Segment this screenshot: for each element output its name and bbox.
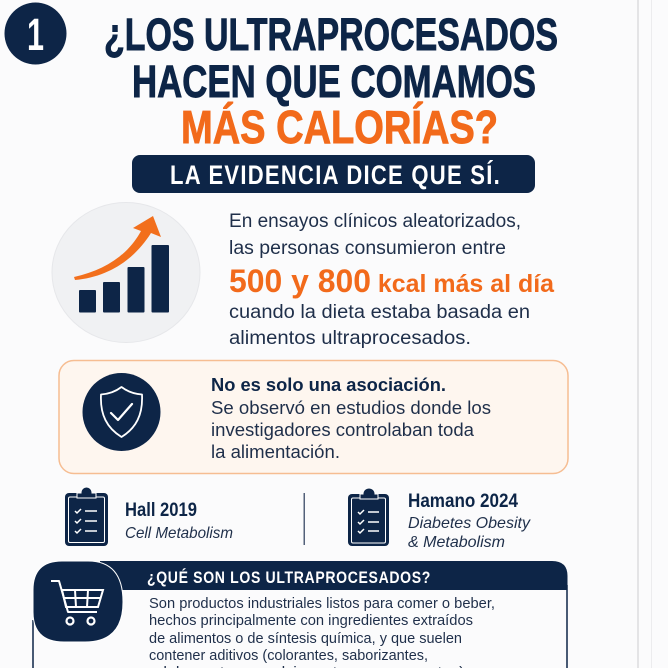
reference: Hamano 2024: Hamano 2024 — [408, 491, 518, 512]
reference: Hamano 2024: Diabetes Obesity — [408, 515, 531, 532]
highlighted calorie figure: 500 y 800 kcal más al día — [229, 263, 555, 299]
callout: not just an association — [59, 360, 568, 474]
callout text: No es solo una asociación. — [211, 375, 446, 395]
callout text: investigadores controlaban toda — [211, 420, 475, 440]
key finding text: las personas consumieron entre — [229, 238, 506, 259]
callout text: Se observó en estudios donde los — [211, 398, 491, 418]
title: HACEN QUE COMAMOS — [132, 56, 536, 107]
title: MÁS CALORÍAS? — [181, 101, 498, 153]
panel body text: Son productos industriales listos para comer o beber, — [149, 595, 495, 612]
callout text — [211, 375, 491, 462]
subtitle banner — [132, 155, 535, 193]
panel header: ¿QUÉ SON LOS ULTRAPROCESADOS? — [147, 568, 431, 587]
reference: Hall 2019: Hall 2019 — [125, 500, 197, 521]
reference: Hall 2019: Cell Metabolism — [125, 525, 233, 542]
reference: Hamano 2024: & Metabolism — [408, 534, 505, 551]
reference: Hall 2019 — [65, 487, 233, 546]
key finding text — [229, 211, 555, 349]
panel body text: hechos principalmente con ingredientes extraídos — [149, 612, 473, 629]
callout text: la alimentación. — [211, 442, 340, 462]
subtitle banner: LA EVIDENCIA DICE QUE SÍ. — [170, 160, 501, 190]
panel body text: contener aditivos (colorantes, saborizantes, — [149, 647, 428, 664]
key finding text: En ensayos clínicos aleatorizados, — [229, 211, 521, 232]
number badge: 1 — [27, 9, 44, 60]
panel body text — [149, 595, 495, 668]
icon: clipboard checklist — [65, 487, 108, 546]
title — [104, 9, 558, 153]
icon: clipboard checklist — [348, 488, 389, 546]
key finding text: alimentos ultraprocesados. — [229, 328, 471, 349]
icon: shopping cart badge — [33, 561, 123, 642]
panel body text: de alimentos o de síntesis química, y que suelen — [149, 630, 462, 647]
icon: rising bar chart with arrow — [52, 202, 200, 342]
panel header — [100, 561, 568, 590]
key finding text: cuando la dieta estaba basada en — [229, 302, 530, 323]
panel: what are ultra-processed foods — [33, 561, 568, 668]
number badge — [4, 2, 66, 64]
icon: shield with check — [82, 373, 160, 451]
reference: Hamano 2024 — [348, 488, 531, 551]
